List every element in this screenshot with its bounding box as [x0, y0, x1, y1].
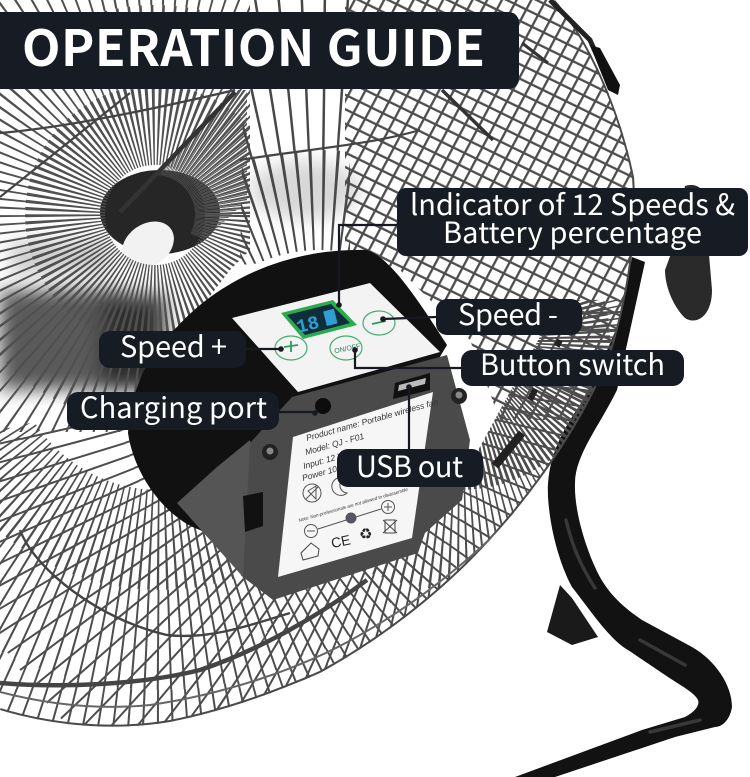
- button plus: [275, 336, 307, 360]
- white top panel: [232, 283, 440, 392]
- icon: muted speaker: [303, 484, 321, 502]
- box front face: [243, 355, 470, 600]
- icon: bin: [383, 520, 397, 533]
- hub: [100, 170, 220, 254]
- label: button switch: Button switch: [480, 342, 665, 384]
- upper middle wires: [240, 0, 350, 265]
- rim clips and knob: [550, 0, 712, 321]
- label: charging port: Charging port: [80, 385, 267, 427]
- LCD display: [281, 300, 357, 339]
- upper right mesh: [340, 0, 650, 425]
- control box: [177, 283, 470, 600]
- guard rings and support bars: [0, 0, 635, 727]
- icon: house: [301, 543, 319, 560]
- label: indicator: [397, 182, 748, 256]
- side clip: [243, 492, 263, 532]
- leader dots: [278, 302, 412, 416]
- mark: CE: CE: [330, 531, 352, 551]
- stand foot: [547, 585, 598, 645]
- product label: Input: 12 V: [302, 450, 345, 471]
- product label: [278, 392, 439, 577]
- adjustment knob: [665, 185, 712, 321]
- screw right: [451, 388, 467, 404]
- product label: Model: QJ - F01: [304, 431, 365, 457]
- label: speed minus: Speed -: [458, 292, 558, 334]
- rear radial wires: [0, 0, 250, 432]
- icon: moon: [332, 477, 347, 495]
- charging socket: [315, 398, 331, 414]
- hub opening: [122, 222, 174, 268]
- lower mesh: [0, 300, 624, 727]
- label: speed plus: Speed +: [120, 324, 227, 366]
- screw left: [262, 444, 278, 460]
- button on off: [330, 336, 362, 360]
- product label: Power 10 W: [301, 461, 349, 483]
- dense rear wires: [158, 90, 247, 240]
- rear background with motor: [0, 160, 360, 390]
- usb port: [393, 373, 430, 399]
- box left face: [177, 440, 262, 577]
- icon: recycle: ♻: [359, 525, 372, 543]
- product label: Product name: Portable wireless fan: [305, 397, 439, 443]
- black motor collar: [128, 250, 447, 590]
- title banner: OPERATION GUIDE: [22, 9, 485, 81]
- label: usb out: USB out: [356, 444, 463, 486]
- label: indicator: Battery percentage: [443, 210, 702, 252]
- label: speed plus: [99, 324, 246, 368]
- button on off: ON/OFF: [334, 343, 361, 355]
- stand tube: [515, 257, 732, 777]
- button minus: [363, 311, 395, 335]
- product label: Note: Non-professionals are not allowed to disassemble: [298, 487, 409, 523]
- speed slider: [304, 500, 394, 538]
- label: speed minus: [436, 292, 582, 335]
- LCD display: 18: [294, 312, 322, 339]
- label: indicator: lndicator of 12 Speeds &: [410, 182, 735, 224]
- leader lines: [246, 225, 461, 449]
